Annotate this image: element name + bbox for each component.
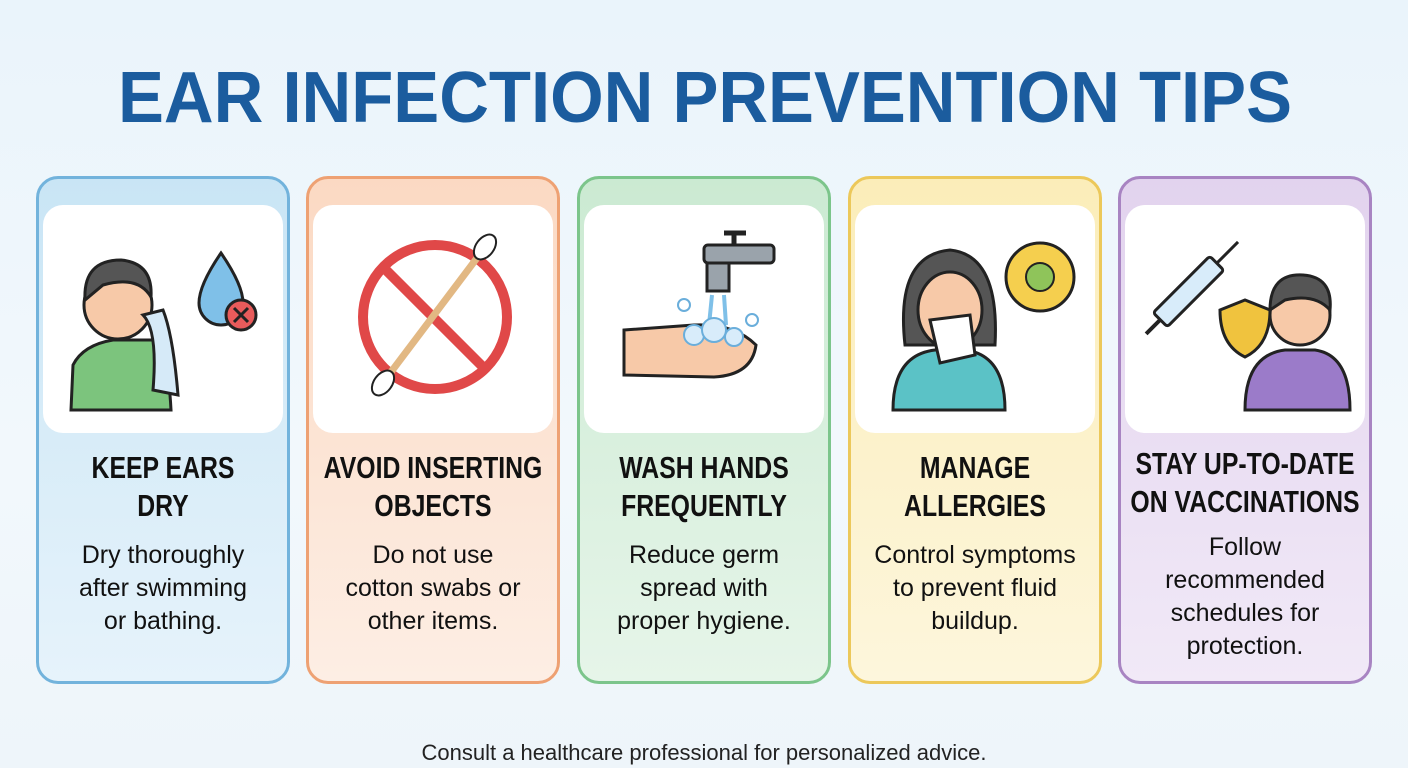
heading: OBJECTS <box>374 488 492 523</box>
icon: boy drying ear <box>43 205 283 433</box>
text: Do not use <box>373 541 493 569</box>
heading: WASH HANDS <box>619 450 789 485</box>
text: to prevent fluid <box>893 574 1057 602</box>
heading <box>904 450 1046 523</box>
panel: avoid inserting objects <box>306 176 560 684</box>
icon: no cotton swab <box>313 205 553 433</box>
text: buildup. <box>931 607 1019 635</box>
heading <box>1130 446 1360 519</box>
icon: hands under tap <box>584 205 824 433</box>
heading: ALLERGIES <box>904 488 1046 523</box>
text: spread with <box>640 574 768 602</box>
text: after swimming <box>79 574 247 602</box>
text: Reduce germ <box>629 541 779 569</box>
text: Dry thoroughly <box>82 541 244 569</box>
text: cotton swabs or <box>345 574 521 602</box>
footer note: Consult a healthcare professional for personalized advice. <box>422 740 986 765</box>
panel: vaccinations <box>1118 176 1372 684</box>
text <box>874 541 1076 635</box>
heading: KEEP EARS <box>92 450 234 485</box>
icon: sneezing woman and germ <box>855 205 1095 433</box>
heading: DRY <box>137 488 189 523</box>
text: Control symptoms <box>874 541 1076 569</box>
text: or bathing. <box>104 607 222 635</box>
text <box>1165 533 1325 660</box>
panel: keep ears dry <box>36 176 290 684</box>
text: protection. <box>1187 632 1303 660</box>
text <box>617 541 791 635</box>
text <box>79 541 247 635</box>
text: Follow <box>1209 533 1281 561</box>
heading: MANAGE <box>920 450 1030 485</box>
heading <box>324 450 542 523</box>
heading: STAY UP-TO-DATE <box>1135 446 1355 481</box>
panel: wash hands <box>577 176 831 684</box>
panel: manage allergies <box>848 176 1102 684</box>
text: schedules for <box>1171 599 1319 627</box>
text: other items. <box>368 607 498 635</box>
heading: AVOID INSERTING <box>324 450 542 485</box>
heading <box>619 450 789 523</box>
icon: syringe, shield, child <box>1125 205 1365 433</box>
heading: FREQUENTLY <box>621 488 787 523</box>
heading: ON VACCINATIONS <box>1130 484 1360 519</box>
text: recommended <box>1165 566 1325 594</box>
heading <box>92 450 234 523</box>
text: proper hygiene. <box>617 607 791 635</box>
text <box>345 541 521 635</box>
title: EAR INFECTION PREVENTION TIPS <box>118 58 1292 138</box>
